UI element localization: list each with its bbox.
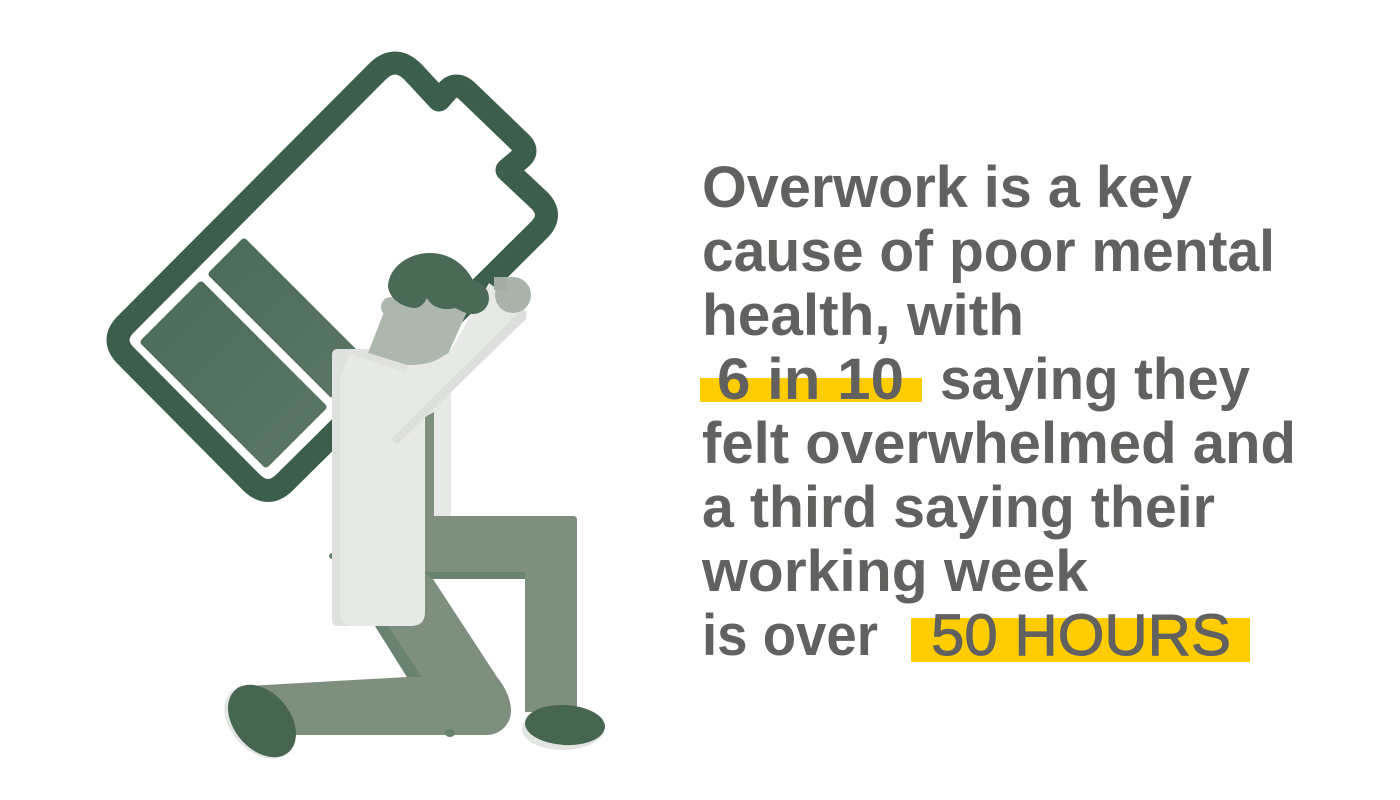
leg shadow <box>420 572 525 579</box>
line 1: Overwork is a key <box>702 155 1192 220</box>
coat front <box>340 352 425 626</box>
battery outline <box>118 63 546 490</box>
hand <box>495 277 531 313</box>
knee detail <box>445 729 455 737</box>
ear <box>381 297 401 317</box>
line 4: saying they <box>940 347 1250 412</box>
back panel of shirt <box>345 350 451 516</box>
sleeve shadow <box>391 310 526 445</box>
stat: 6 in 10: 6 in 10 <box>717 347 904 412</box>
line 2: cause of poor mental <box>702 219 1275 284</box>
front foot shadow <box>522 708 604 750</box>
highlight: 50 hours <box>911 618 1250 662</box>
belt dot <box>329 553 335 559</box>
line 8: is over <box>702 603 878 668</box>
battery cell: upper <box>212 242 364 394</box>
line 3: health, with <box>702 283 1024 348</box>
back foot <box>214 672 310 770</box>
thumb <box>494 277 507 290</box>
head <box>368 280 470 365</box>
icon: tilted low battery <box>118 63 546 490</box>
battery cell: lower <box>144 285 323 464</box>
stat: 50 hours: 50 HOURS <box>931 603 1231 668</box>
thigh shadow <box>375 626 422 677</box>
front foot <box>524 703 606 747</box>
collar <box>350 349 407 373</box>
kneeling leg <box>247 570 511 735</box>
raised leg <box>420 516 577 712</box>
line 7: working week <box>701 539 1089 604</box>
back foot shadow <box>210 672 310 772</box>
torso strip <box>425 412 434 522</box>
line 6: a third saying their <box>702 475 1215 540</box>
text block: overwork statement <box>701 155 1296 668</box>
face <box>368 280 470 365</box>
figure: kneeling person carrying battery <box>210 253 606 772</box>
hair <box>388 253 489 314</box>
highlight: 6 in 10 <box>700 378 922 402</box>
line 5: felt overwhelmed and <box>702 411 1296 476</box>
coat shadow side <box>332 349 400 626</box>
raised arm sleeve <box>345 283 527 445</box>
